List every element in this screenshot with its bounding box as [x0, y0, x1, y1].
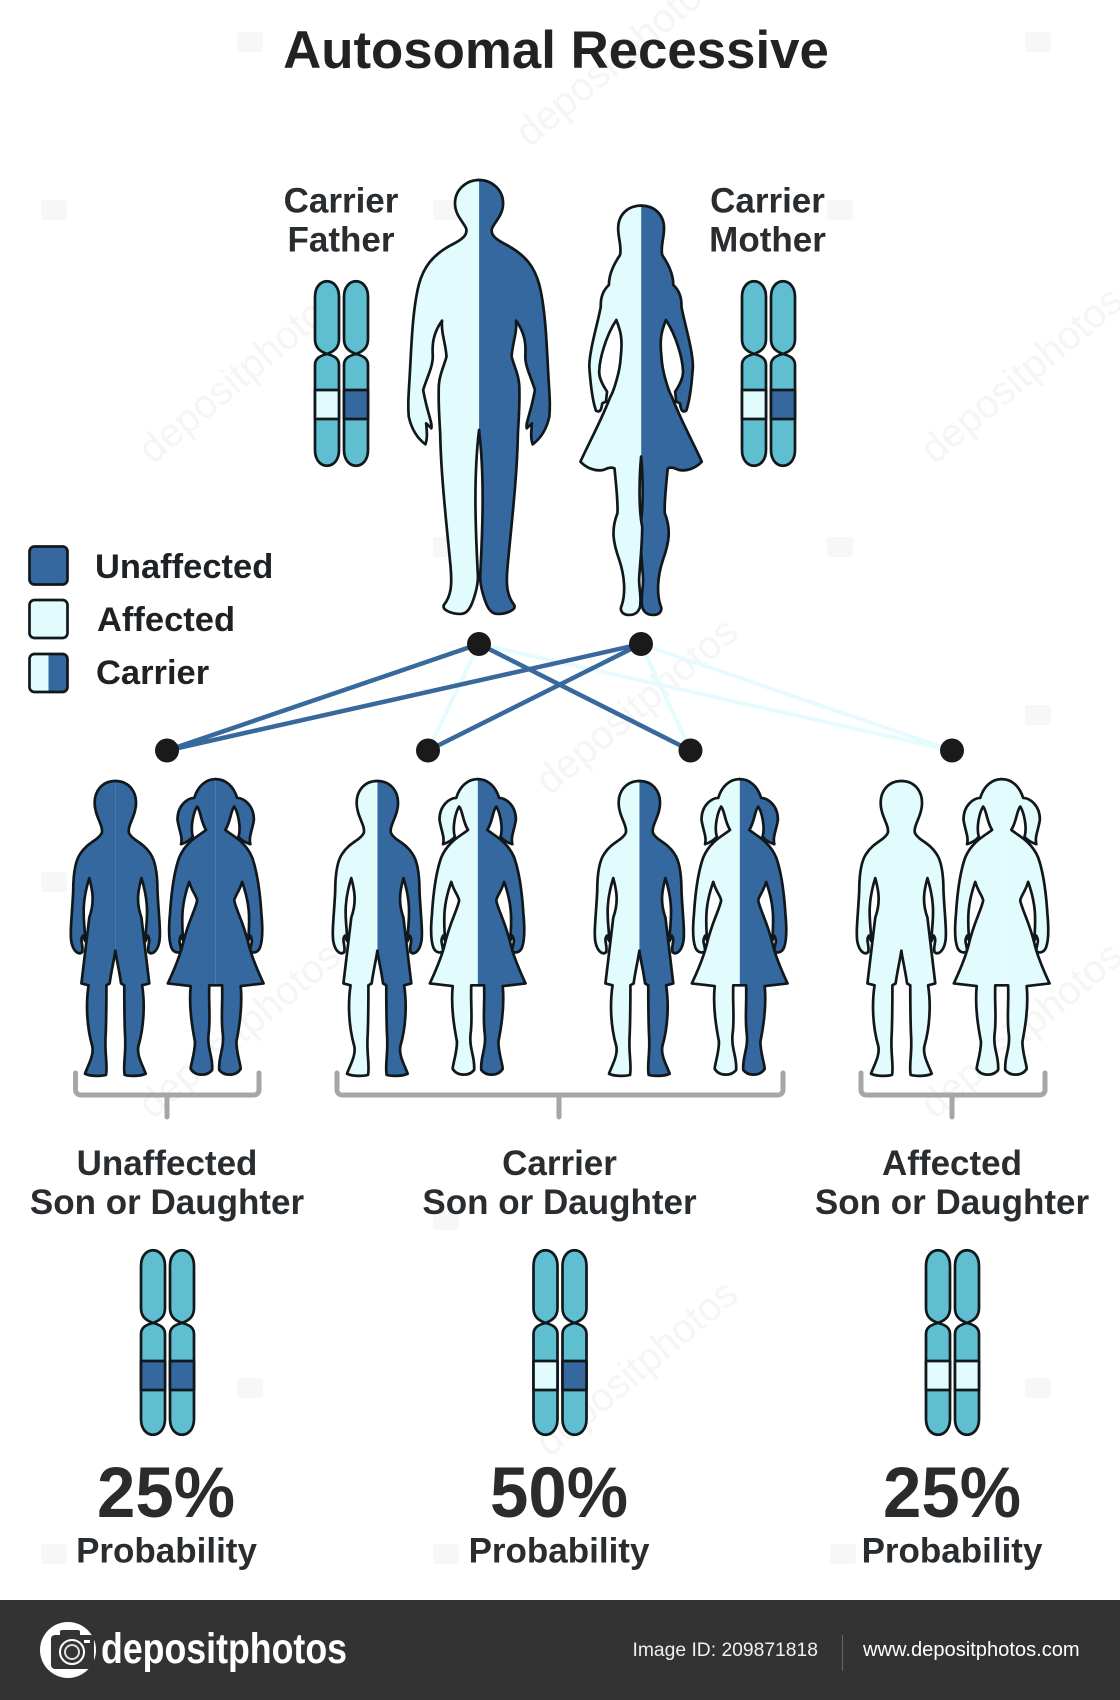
label: carrier father: Father — [288, 220, 395, 260]
unaffected girl — [168, 779, 264, 1075]
watermark: depositphotos — [527, 1271, 746, 1465]
probability: 50 percent carrier — [469, 1454, 650, 1570]
label: carrier son or daughter: Son or Daughter — [422, 1183, 697, 1222]
probability: 25 percent affected: Probability — [862, 1532, 1043, 1570]
carrier girl 2 — [692, 779, 788, 1075]
father chromosomes — [315, 281, 368, 466]
website url: www.depositphotos.com — [862, 1639, 1080, 1661]
label: unaffected son or daughter: Unaffected — [77, 1144, 257, 1183]
label: carrier father: Carrier — [284, 182, 399, 220]
watermark: depositphotos — [130, 933, 349, 1127]
legend: Carrier — [96, 654, 209, 692]
label: affected son or daughter: Affected — [882, 1144, 1022, 1183]
logo wordmark: depositphotos — [101, 1625, 347, 1673]
legend: Affected — [97, 601, 235, 639]
probability: 50 percent carrier: 50% — [490, 1454, 628, 1533]
title: Autosomal Recessive — [283, 21, 829, 80]
label: carrier mother: Mother — [709, 220, 826, 260]
bracket: carrier — [337, 1073, 783, 1117]
parent and child nodes — [155, 632, 964, 762]
inheritance lines — [167, 644, 952, 750]
label: unaffected son or daughter: Son or Daughter — [30, 1183, 304, 1222]
label: affected son or daughter: Son or Daughter — [815, 1183, 1089, 1222]
bracket: affected — [861, 1073, 1045, 1117]
legend — [30, 546, 273, 692]
carrier boy 2 — [595, 781, 684, 1076]
affected girl — [954, 779, 1050, 1075]
label: carrier mother: Carrier — [710, 182, 825, 220]
chromosomes: affected — [926, 1250, 979, 1435]
watermark: depositphotos — [130, 278, 349, 472]
mother figure — [580, 206, 702, 615]
father figure — [408, 180, 550, 614]
chromosomes: unaffected — [141, 1250, 194, 1435]
bracket: unaffected — [76, 1073, 259, 1117]
mother chromosomes — [742, 281, 795, 466]
unaffected boy — [71, 781, 160, 1076]
footer bar — [0, 1600, 1120, 1700]
divider — [842, 1635, 844, 1671]
probability: 50 percent carrier: Probability — [469, 1532, 650, 1570]
probability: 25 percent affected: 25% — [883, 1454, 1021, 1533]
probability: 25 percent affected — [862, 1454, 1043, 1570]
image id: Image ID: 209871818 — [632, 1640, 818, 1661]
carrier boy 1 — [333, 781, 422, 1076]
watermark: depositphotos — [527, 609, 746, 803]
affected boy — [857, 781, 946, 1076]
probability: 25 percent unaffected: Probability — [76, 1532, 257, 1570]
probability: 25 percent unaffected: 25% — [97, 1454, 235, 1533]
legend: Unaffected — [95, 548, 273, 586]
label: carrier son or daughter: Carrier — [502, 1144, 617, 1183]
icon: camera logo — [40, 1622, 96, 1678]
probability: 25 percent unaffected — [76, 1454, 257, 1570]
chromosomes: carrier — [534, 1250, 586, 1435]
carrier girl 1 — [430, 779, 526, 1075]
